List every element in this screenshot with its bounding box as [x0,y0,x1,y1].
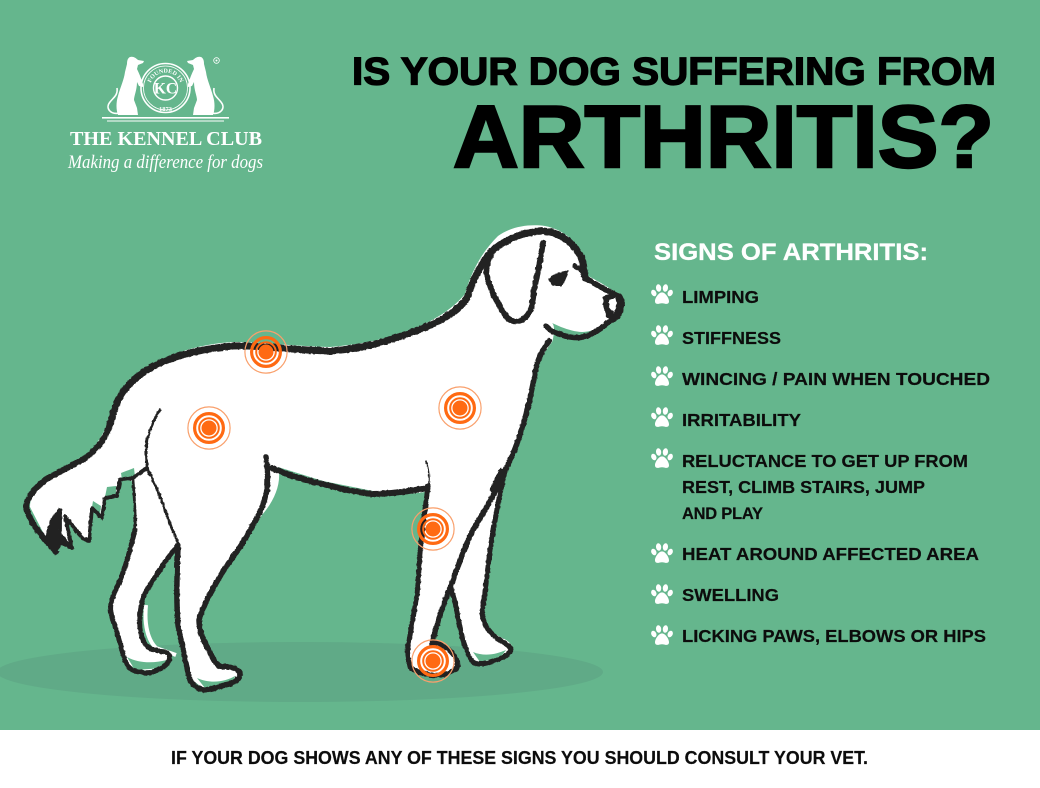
sign: wincing: WINCING / PAIN WHEN TOUCHED [682,369,990,389]
icon: paw [650,325,674,345]
footer band [0,730,1040,788]
sign: reluctance: RELUCTANCE TO GET UP FROM [682,451,968,471]
logo name: THE KENNEL CLUB [70,129,262,150]
pain point: chest [439,387,481,429]
tail outer [26,424,110,552]
icon: paw [650,448,674,468]
belly [272,468,428,494]
white sliver beside far hind leg [145,605,176,655]
far front leg inner [492,470,501,490]
sign: reluctance: AND PLAY [682,505,763,523]
logo emblem: dogs and badge: FOUNDED IN [147,68,184,83]
icon: paw [650,625,674,645]
sign: limping: LIMPING [682,287,759,307]
list heading: SIGNS OF ARTHRITIS: [654,239,928,266]
brow [575,266,584,272]
tail fringe [47,468,147,548]
sign: licking: LICKING PAWS, ELBOWS OR HIPS [682,626,986,646]
neck and chest [432,341,549,645]
footer message: IF YOUR DOG SHOWS ANY OF THESE SIGNS YOU SHOULD CONSULT YOUR VET. [171,748,868,768]
icon: paw [650,366,674,386]
title [352,50,996,186]
sign: heat: HEAT AROUND AFFECTED AREA [682,544,979,564]
pain point: hip [188,407,230,449]
thigh crease [146,410,178,543]
dog body fill [30,225,622,688]
pain point: elbow [412,508,454,550]
signs of arthritis list [650,239,990,646]
chest hairline [426,461,429,488]
green gaps in the fill [92,468,506,688]
icon: paw [650,407,674,427]
logo emblem: dogs and badge [102,56,229,122]
title line 1: IS YOUR DOG SUFFERING FROM [352,50,996,94]
far front leg [451,472,511,664]
pain point: paw [412,640,454,682]
logo emblem: dogs and badge: KC [154,80,177,98]
ground shadow [0,642,603,702]
dog illustration [26,225,625,690]
icon: paw [650,543,674,563]
sign: swelling: SWELLING [682,585,779,605]
ear [486,243,543,321]
near front leg [408,486,458,675]
sign: irritability: IRRITABILITY [682,410,801,430]
sign: reluctance [682,451,968,523]
icon: paw [650,584,674,604]
hind near leg [177,457,268,690]
eye [548,270,569,286]
sign: reluctance: REST, CLIMB STAIRS, JUMP [682,477,925,497]
back and head outline [110,231,585,424]
logo tagline: Making a difference for dogs [67,153,263,173]
icon: paw [650,284,674,304]
logo: The Kennel Club [67,56,263,173]
logo emblem: dogs and badge: 1873 [159,106,173,113]
far hind leg [111,530,178,673]
muzzle outline [546,278,621,338]
far hind leg back edge [133,480,135,530]
nose [603,292,625,322]
title line 2: ARTHRITIS? [453,87,994,186]
sign: stiffness: STIFFNESS [682,328,781,348]
pain point: shoulder blade [245,331,287,373]
